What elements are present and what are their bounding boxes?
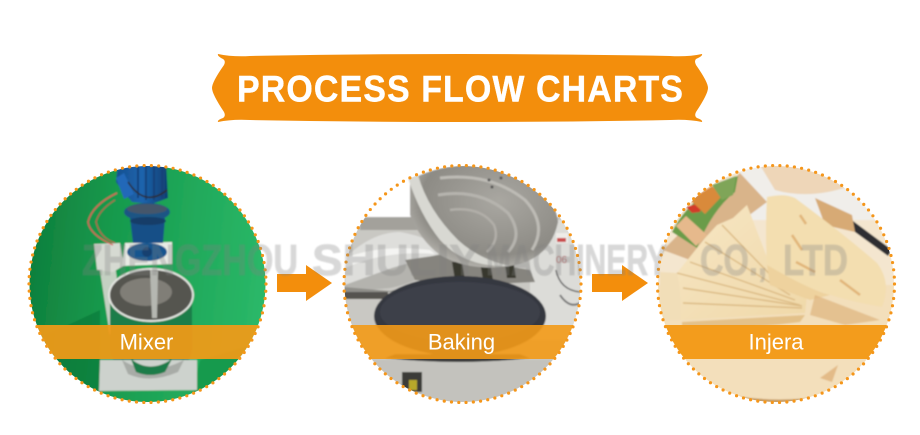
baking label: Baking [428,330,495,354]
mixer dotted ring [29,166,266,402]
mixer label: Mixer [120,330,173,354]
mixer photo [25,160,270,405]
step: baking photo circle [340,160,590,407]
step: injera photo circle [655,160,900,405]
watermark: MACHINERY [486,236,667,285]
baking photo [340,160,590,407]
step: mixer photo circle [25,160,270,405]
watermark: ZHENGZHOU [82,236,298,285]
injera dotted ring [658,166,894,402]
injera label: Injera [748,330,804,354]
watermark: LTD [783,236,848,285]
title banner [212,54,708,122]
baking photo: 06 [556,255,568,266]
injera photo [655,160,900,405]
title text: PROCESS FLOW CHARTS [237,69,683,110]
baking label band [340,325,585,359]
baking dotted ring [344,166,581,402]
watermark: CO., [700,236,767,285]
injera label band [655,325,900,359]
watermark [82,236,848,285]
flow arrow 2 [592,265,648,301]
mixer label band [25,325,270,359]
watermark: SHULIY [312,236,480,285]
flow arrow 1 [277,265,332,301]
